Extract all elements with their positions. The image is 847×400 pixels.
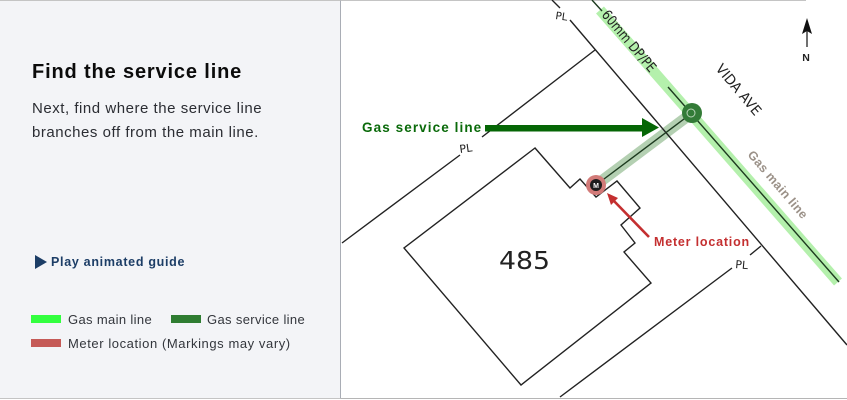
legend label: meter location: Meter location (Markings may vary) <box>68 336 291 351</box>
icon: north arrow: N <box>802 52 810 64</box>
handwritten label: PL right: PL <box>735 258 749 272</box>
link: play animated guide <box>35 255 185 269</box>
handwritten label: 60mm DP/PE: 60mm DP/PE <box>598 7 659 76</box>
handwritten label: VIDA AVE: VIDA AVE <box>712 61 764 119</box>
legend <box>31 312 305 351</box>
arrow: to meter location <box>607 193 649 237</box>
meter marker <box>586 175 606 195</box>
gas service line highlight <box>596 113 692 185</box>
legend label: gas service line: Gas service line <box>207 312 305 327</box>
handwritten label: house number: 485 <box>499 246 550 275</box>
icon: north arrow <box>802 18 812 64</box>
arrow: to gas service line <box>485 118 659 137</box>
label: gas service line: Gas service line <box>362 120 482 135</box>
label: gas main line: Gas main line <box>745 148 811 222</box>
body text <box>32 100 262 141</box>
gas main line highlight <box>600 10 838 282</box>
map linework: property lines <box>342 0 847 397</box>
link text: Play animated guide <box>51 255 185 269</box>
handwritten label: PL left: PL <box>459 141 474 156</box>
service tie-in node <box>682 103 702 123</box>
map frame <box>341 0 847 398</box>
label: meter location: Meter location <box>654 235 750 249</box>
heading: Find the service line <box>32 61 242 83</box>
map linework: house outline 485 <box>404 148 651 385</box>
legend swatch: gas main line <box>31 315 61 323</box>
icon: play triangle <box>35 255 47 269</box>
legend swatch: meter location <box>31 339 61 347</box>
map linework: gas main and service drawn lines <box>592 0 839 282</box>
body text: branches off from the main line. <box>32 124 259 141</box>
legend swatch: gas service line <box>171 315 201 323</box>
legend label: gas main line: Gas main line <box>68 312 152 327</box>
panel: instructions <box>0 0 341 399</box>
meter marker: M <box>593 183 599 190</box>
body text: Next, find where the service line <box>32 100 262 117</box>
handwritten label: PL top: PL <box>555 10 568 24</box>
